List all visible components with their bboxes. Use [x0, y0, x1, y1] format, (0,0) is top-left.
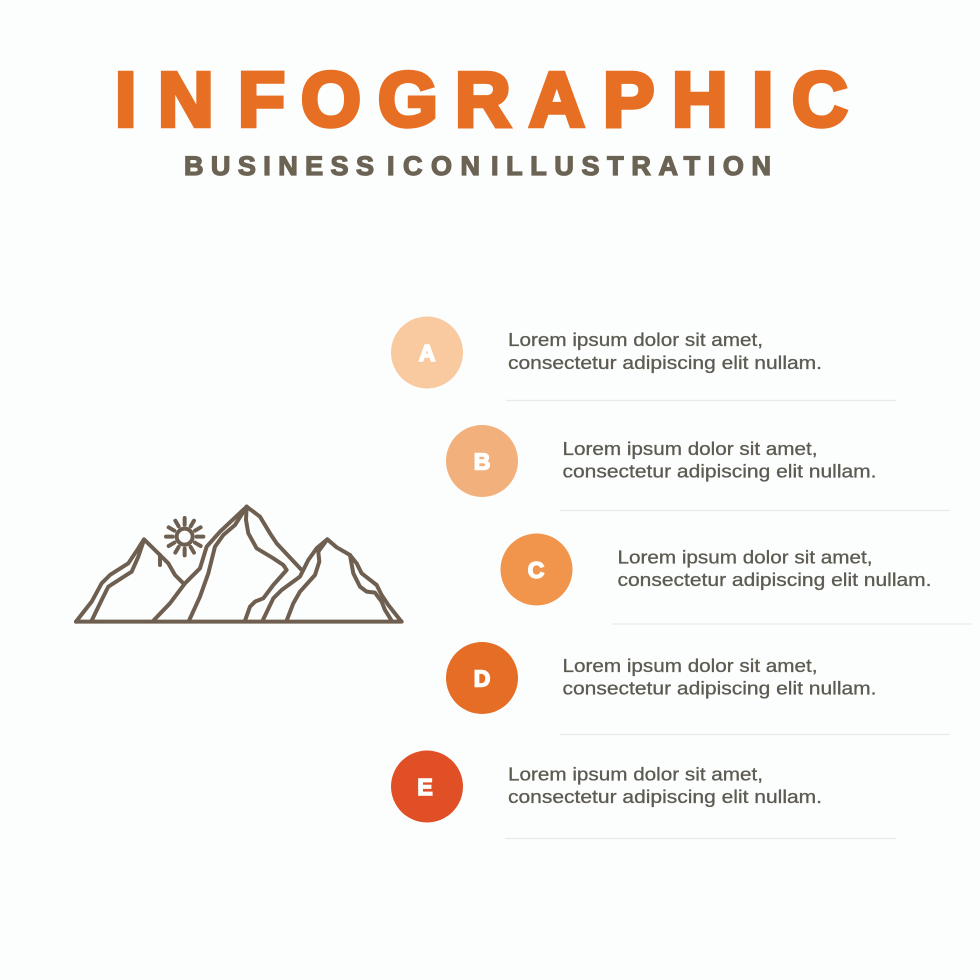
item C: C	[528, 557, 544, 583]
icon: mountains with sun	[76, 507, 402, 622]
item C: consectetur adipiscing elit nullam.	[618, 569, 932, 590]
subtitle: ILLUSTRATION	[491, 151, 771, 181]
item E	[391, 750, 896, 838]
subtitle: ICON	[387, 151, 480, 181]
item A	[391, 316, 896, 400]
item A: consectetur adipiscing elit nullam.	[508, 352, 822, 373]
item C: Lorem ipsum dolor sit amet,	[618, 546, 872, 568]
item A: Lorem ipsum dolor sit amet,	[508, 329, 763, 350]
item D: consectetur adipiscing elit nullam.	[562, 678, 876, 698]
item D	[446, 642, 950, 734]
item D: Lorem ipsum dolor sit amet,	[562, 655, 818, 676]
item C	[500, 534, 972, 624]
item E: E	[417, 774, 433, 800]
item D: D	[474, 666, 490, 692]
item E: Lorem ipsum dolor sit amet,	[508, 764, 763, 784]
subtitle: BUSINESS	[184, 151, 374, 181]
title: INFOGRAPHIC	[115, 57, 848, 143]
item E: consectetur adipiscing elit nullam.	[508, 786, 822, 807]
item B: consectetur adipiscing elit nullam.	[562, 460, 876, 482]
item B	[446, 425, 950, 510]
item A: A	[419, 340, 435, 366]
item B: B	[474, 448, 490, 474]
subtitle	[184, 151, 771, 181]
item B: Lorem ipsum dolor sit amet,	[562, 438, 818, 459]
